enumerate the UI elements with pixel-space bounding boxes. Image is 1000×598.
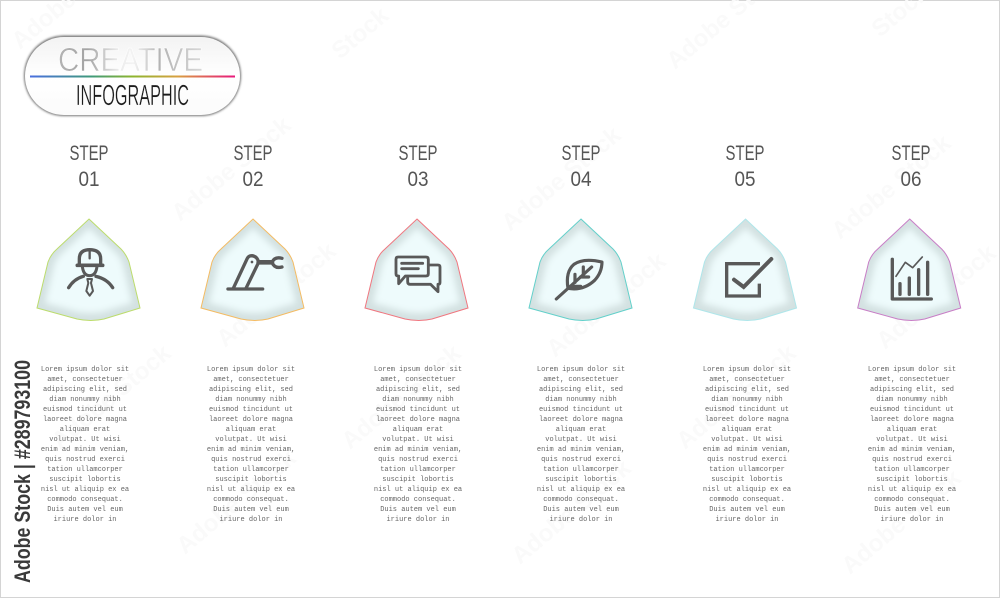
- panel: step 6 shield: [858, 219, 961, 320]
- text block: step 4: Lorem ipsum dolor sit: [537, 366, 625, 374]
- icon: engineer with hard hat: [69, 250, 113, 296]
- step 3 heading: STEP: [398, 142, 438, 165]
- text block: step 1: amet, consectetuer: [47, 376, 123, 384]
- text: Adobe Stock: [672, 339, 802, 455]
- text block: step 4: [537, 366, 625, 524]
- text block: step 5: laoreet dolore magna: [705, 416, 789, 424]
- text block: step 5: aliquam erat: [722, 426, 772, 434]
- text block: step 4: commodo consequat.: [543, 496, 619, 504]
- panel: step 2 shield: [201, 219, 304, 320]
- text block: step 3: amet, consectetuer: [380, 376, 456, 384]
- text: Adobe Stock: [212, 237, 342, 353]
- text block: step 3: suscipit lobortis: [382, 476, 454, 484]
- text block: step 6: enim ad minim veniam,: [868, 446, 956, 454]
- text: Adobe Stock: [47, 339, 177, 455]
- text block: step 4: euismod tincidunt ut: [539, 406, 623, 414]
- logo badge: [24, 36, 241, 116]
- text: Adobe Stock: [507, 454, 637, 570]
- text block: step 4: volutpat. Ut wisi: [545, 436, 617, 444]
- text block: step 4: quis nostrud exerci: [541, 456, 621, 464]
- text block: step 1: laoreet dolore magna: [43, 416, 127, 424]
- text block: step 2: volutpat. Ut wisi: [215, 436, 287, 444]
- logo rainbow line: [30, 76, 235, 78]
- step 2 heading: [234, 142, 272, 191]
- text block: step 4: tation ullamcorper: [543, 466, 619, 474]
- text: Adobe Stock: [337, 339, 467, 455]
- text block: step 1: iriure dolor in: [53, 516, 116, 524]
- text block: step 2: euismod tincidunt ut: [209, 406, 293, 414]
- text: Adobe Stock: [872, 239, 1000, 355]
- text block: step 4: enim ad minim veniam,: [537, 446, 625, 454]
- text block: step 6: Duis autem vel eum: [874, 506, 950, 514]
- text: Adobe Stock: [167, 111, 297, 227]
- text block: step 1: aliquam erat: [60, 426, 110, 434]
- text block: step 6: Lorem ipsum dolor sit: [868, 366, 956, 374]
- text block: step 2: amet, consectetuer: [213, 376, 289, 384]
- text block: step 6: euismod tincidunt ut: [870, 406, 954, 414]
- text block: step 4: Duis autem vel eum: [543, 506, 619, 514]
- text block: step 1: volutpat. Ut wisi: [49, 436, 121, 444]
- text block: step 6: commodo consequat.: [874, 496, 950, 504]
- text block: step 5: commodo consequat.: [709, 496, 785, 504]
- text block: step 1: quis nostrud exerci: [45, 456, 125, 464]
- text: Adobe Stock: [497, 121, 627, 237]
- text block: step 5: [703, 366, 791, 524]
- text block: step 6: volutpat. Ut wisi: [876, 436, 948, 444]
- text block: step 2: diam nonummy nibh: [215, 396, 287, 404]
- text: Adobe Stock: [837, 464, 967, 580]
- watermark: stock id: Adobe Stock | #289793100: [10, 360, 35, 583]
- text block: step 3: adipiscing elit, sed: [376, 386, 460, 394]
- text block: step 4: suscipit lobortis: [545, 476, 617, 484]
- step 3 heading: [398, 142, 438, 191]
- step 6 heading: 06: [900, 168, 922, 191]
- text block: step 5: nisl ut aliquip ex ea: [703, 486, 791, 494]
- text block: step 1: [41, 366, 129, 524]
- text block: step 5: Duis autem vel eum: [709, 506, 785, 514]
- step 4 heading: STEP: [562, 142, 600, 165]
- step 3 heading: 03: [408, 168, 428, 191]
- step 2 heading: 02: [242, 168, 264, 191]
- text block: step 2: adipiscing elit, sed: [209, 386, 293, 394]
- text block: step 1: nisl ut aliquip ex ea: [41, 486, 129, 494]
- text block: step 2: Duis autem vel eum: [213, 506, 289, 514]
- text block: step 5: volutpat. Ut wisi: [711, 436, 783, 444]
- text block: step 2: Lorem ipsum dolor sit: [207, 366, 295, 374]
- text block: step 1: commodo consequat.: [47, 496, 123, 504]
- text block: step 5: tation ullamcorper: [709, 466, 785, 474]
- panel: step 1 shield: [37, 219, 140, 320]
- text: Adobe Stock: [827, 129, 957, 245]
- text block: step 6: diam nonummy nibh: [876, 396, 948, 404]
- text block: step 5: suscipit lobortis: [711, 476, 783, 484]
- panel: step 3 shield: [365, 219, 468, 320]
- text block: step 4: adipiscing elit, sed: [539, 386, 623, 394]
- text block: step 3: nisl ut aliquip ex ea: [374, 486, 462, 494]
- step 1 heading: [70, 142, 108, 191]
- text: Stock: [327, 1, 394, 65]
- text block: step 1: adipiscing elit, sed: [43, 386, 127, 394]
- text block: step 2: commodo consequat.: [213, 496, 289, 504]
- text block: step 1: enim ad minim veniam,: [41, 446, 129, 454]
- text block: step 3: quis nostrud exerci: [378, 456, 458, 464]
- text block: step 3: volutpat. Ut wisi: [382, 436, 454, 444]
- text block: step 3: Duis autem vel eum: [380, 506, 456, 514]
- text: Adobe Stock: [542, 247, 672, 363]
- text block: step 1: Lorem ipsum dolor sit: [41, 366, 129, 374]
- text block: step 5: amet, consectetuer: [709, 376, 785, 384]
- text block: step 2: tation ullamcorper: [213, 466, 289, 474]
- text block: step 2: nisl ut aliquip ex ea: [207, 486, 295, 494]
- text block: step 2: aliquam erat: [226, 426, 276, 434]
- text block: step 6: laoreet dolore magna: [870, 416, 954, 424]
- text block: step 6: amet, consectetuer: [874, 376, 950, 384]
- text block: step 2: iriure dolor in: [219, 516, 282, 524]
- text block: step 4: aliquam erat: [556, 426, 606, 434]
- text block: step 1: Duis autem vel eum: [47, 506, 123, 514]
- text block: step 5: iriure dolor in: [715, 516, 778, 524]
- text block: step 5: adipiscing elit, sed: [705, 386, 789, 394]
- text block: step 4: laoreet dolore magna: [539, 416, 623, 424]
- text block: step 1: diam nonummy nibh: [49, 396, 121, 404]
- step 4 heading: 04: [570, 168, 592, 191]
- text block: step 3: aliquam erat: [393, 426, 443, 434]
- icon: leaf: [556, 260, 602, 299]
- text block: step 2: enim ad minim veniam,: [207, 446, 295, 454]
- step 5 heading: [726, 142, 764, 191]
- text block: step 4: diam nonummy nibh: [545, 396, 617, 404]
- text block: step 5: quis nostrud exerci: [707, 456, 787, 464]
- text: Adobe Stock: [172, 444, 302, 560]
- step 6 heading: STEP: [892, 142, 930, 165]
- text block: step 6: suscipit lobortis: [876, 476, 948, 484]
- panel: step 5 shield: [694, 219, 796, 320]
- text block: step 3: enim ad minim veniam,: [374, 446, 462, 454]
- text block: step 2: laoreet dolore magna: [209, 416, 293, 424]
- text block: step 1: euismod tincidunt ut: [43, 406, 127, 414]
- text block: step 4: iriure dolor in: [549, 516, 612, 524]
- logo word: infographic: INFOGRAPHIC: [76, 80, 189, 112]
- text block: step 5: Lorem ipsum dolor sit: [703, 366, 791, 374]
- step 1 heading: STEP: [70, 142, 108, 165]
- text block: step 4: amet, consectetuer: [543, 376, 619, 384]
- text block: step 6: aliquam erat: [887, 426, 937, 434]
- text block: step 1: suscipit lobortis: [49, 476, 121, 484]
- step 6 heading: [892, 142, 930, 191]
- text block: step 2: [207, 366, 295, 524]
- step 5 heading: 05: [734, 168, 756, 191]
- text block: step 6: quis nostrud exerci: [872, 456, 952, 464]
- text block: step 3: tation ullamcorper: [380, 466, 456, 474]
- text block: step 6: nisl ut aliquip ex ea: [868, 486, 956, 494]
- icon: robotic arm: [228, 256, 282, 289]
- text block: step 3: laoreet dolore magna: [376, 416, 460, 424]
- text block: step 2: suscipit lobortis: [215, 476, 287, 484]
- text block: step 3: diam nonummy nibh: [382, 396, 454, 404]
- step 5 heading: STEP: [726, 142, 764, 165]
- text block: step 1: tation ullamcorper: [47, 466, 123, 474]
- text block: step 4: nisl ut aliquip ex ea: [537, 486, 625, 494]
- text block: step 5: euismod tincidunt ut: [705, 406, 789, 414]
- step 1 heading: 01: [78, 168, 100, 191]
- logo word: creative: CREATIVE: [58, 41, 203, 78]
- text block: step 6: tation ullamcorper: [874, 466, 950, 474]
- text block: step 3: [374, 366, 462, 524]
- text block: step 2: quis nostrud exerci: [211, 456, 291, 464]
- text block: step 3: commodo consequat.: [380, 496, 456, 504]
- icon: speech bubbles: [396, 257, 440, 292]
- step 4 heading: [562, 142, 600, 191]
- panel: step 4 shield: [529, 219, 632, 320]
- text block: step 6: iriure dolor in: [880, 516, 944, 524]
- step 2 heading: STEP: [234, 142, 272, 165]
- text block: step 6: adipiscing elit, sed: [870, 386, 954, 394]
- icon: checkbox: [727, 259, 771, 296]
- icon: bar chart with trend line: [892, 257, 931, 299]
- text block: step 3: euismod tincidunt ut: [376, 406, 460, 414]
- text block: step 6: [868, 366, 956, 524]
- text block: step 3: Lorem ipsum dolor sit: [374, 366, 462, 374]
- text block: step 5: diam nonummy nibh: [711, 396, 783, 404]
- text block: step 3: iriure dolor in: [386, 516, 450, 524]
- text block: step 5: enim ad minim veniam,: [703, 446, 791, 454]
